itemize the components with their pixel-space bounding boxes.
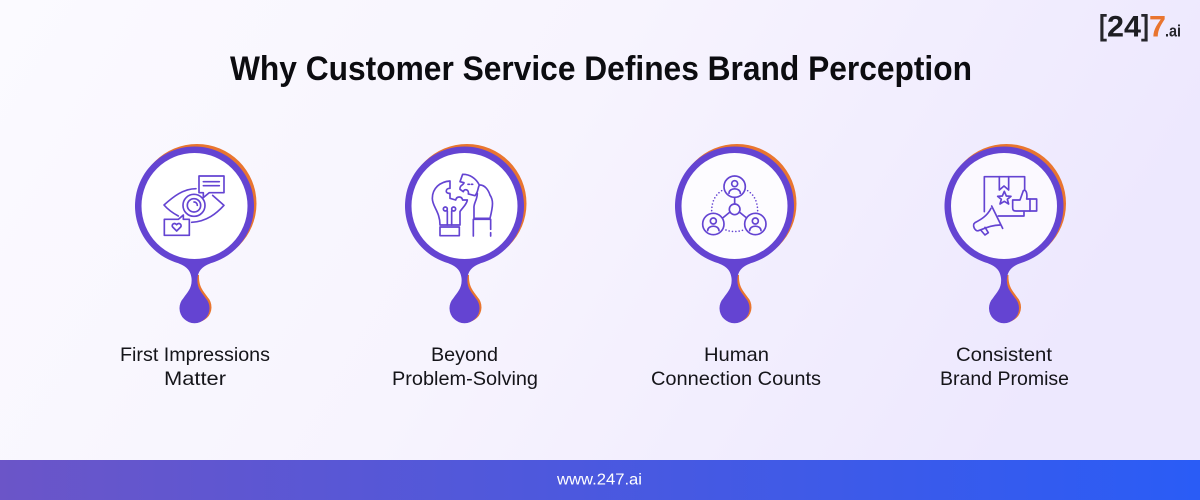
pin: human connection counts: [675, 144, 796, 323]
panel: first impressions: [120, 144, 270, 390]
label: consistent brand promise: Brand Promise: [940, 368, 1069, 390]
label: beyond problem-solving: Problem-Solving: [392, 368, 538, 390]
logo: 7: [1149, 10, 1166, 44]
label: first impressions: Matter: [164, 368, 227, 390]
label: consistent brand promise: [940, 344, 1069, 390]
label: human connection counts: [651, 344, 821, 390]
title: Why Customer Service Defines Brand Perception: [230, 50, 972, 88]
icon: eye with speech bubbles: [164, 176, 224, 235]
label: human connection counts: Connection Counts: [651, 368, 821, 390]
label: consistent brand promise: Consistent: [956, 344, 1053, 366]
pin: beyond problem-solving: [405, 144, 526, 323]
logo: ]: [1141, 10, 1149, 42]
label: beyond problem-solving: [392, 344, 538, 390]
panel: consistent brand promise: [940, 144, 1069, 390]
pin: consistent brand promise: [944, 144, 1066, 323]
footer url: www.247.ai: [556, 472, 642, 488]
label: first impressions: [120, 344, 270, 390]
footer bar: [0, 460, 1200, 500]
label: beyond problem-solving: Beyond: [431, 344, 498, 366]
logo: 24: [1107, 10, 1141, 44]
label: first impressions: First Impressions: [120, 344, 270, 366]
label: human connection counts: Human: [704, 344, 769, 366]
logo: [1099, 10, 1181, 44]
icon: connected people: [703, 176, 766, 235]
icon: box, thumbs up and megaphone: [974, 177, 1037, 235]
pin: first impressions: [135, 144, 256, 323]
icon: light bulb and puzzle: [432, 174, 492, 236]
logo: [: [1099, 10, 1107, 42]
logo: .ai: [1165, 22, 1181, 40]
panel: beyond problem-solving: [392, 144, 538, 390]
panel: human connection counts: [651, 144, 821, 390]
